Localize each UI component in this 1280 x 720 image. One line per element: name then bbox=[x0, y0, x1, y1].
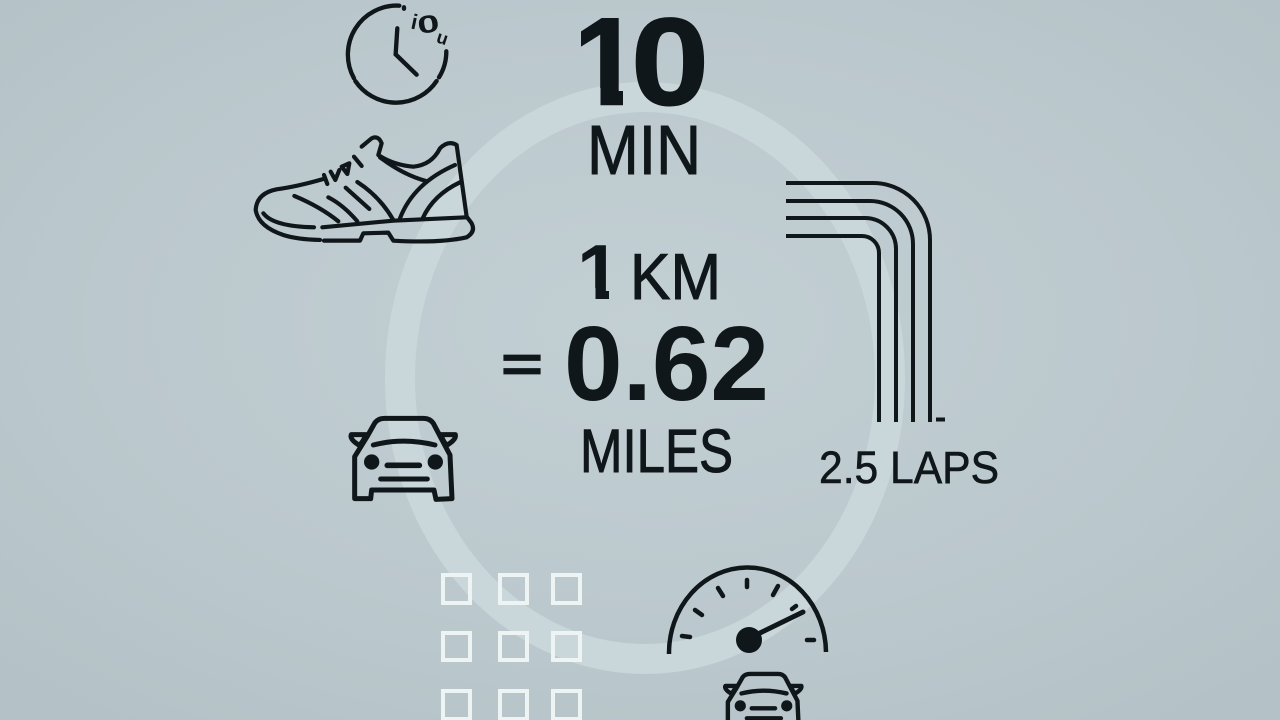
icon: clock bbox=[348, 6, 451, 103]
label: MIN: MIN bbox=[587, 111, 701, 189]
label: 2.5 LAPS: 2.5 LAPS bbox=[819, 442, 999, 493]
label: KM: KM bbox=[630, 240, 721, 313]
equals sign: = bbox=[501, 336, 543, 392]
number: 10 bbox=[581, 17, 704, 106]
icon: clock: i bbox=[409, 10, 420, 34]
icon: speedometer bbox=[669, 567, 826, 654]
number: 0.62: 0.62 bbox=[564, 305, 769, 423]
icon: clock: u bbox=[434, 27, 451, 49]
icon: running shoe bbox=[256, 137, 473, 241]
icon: car bbox=[351, 418, 455, 499]
icon: clock: 0 bbox=[416, 10, 441, 40]
track lines icon bbox=[786, 183, 945, 422]
background ring bbox=[400, 97, 890, 659]
number: 1: 1 bbox=[577, 228, 620, 316]
squares grid bbox=[443, 575, 580, 719]
label: MILES: MILES bbox=[580, 417, 733, 485]
icon: car, small bbox=[725, 674, 801, 720]
